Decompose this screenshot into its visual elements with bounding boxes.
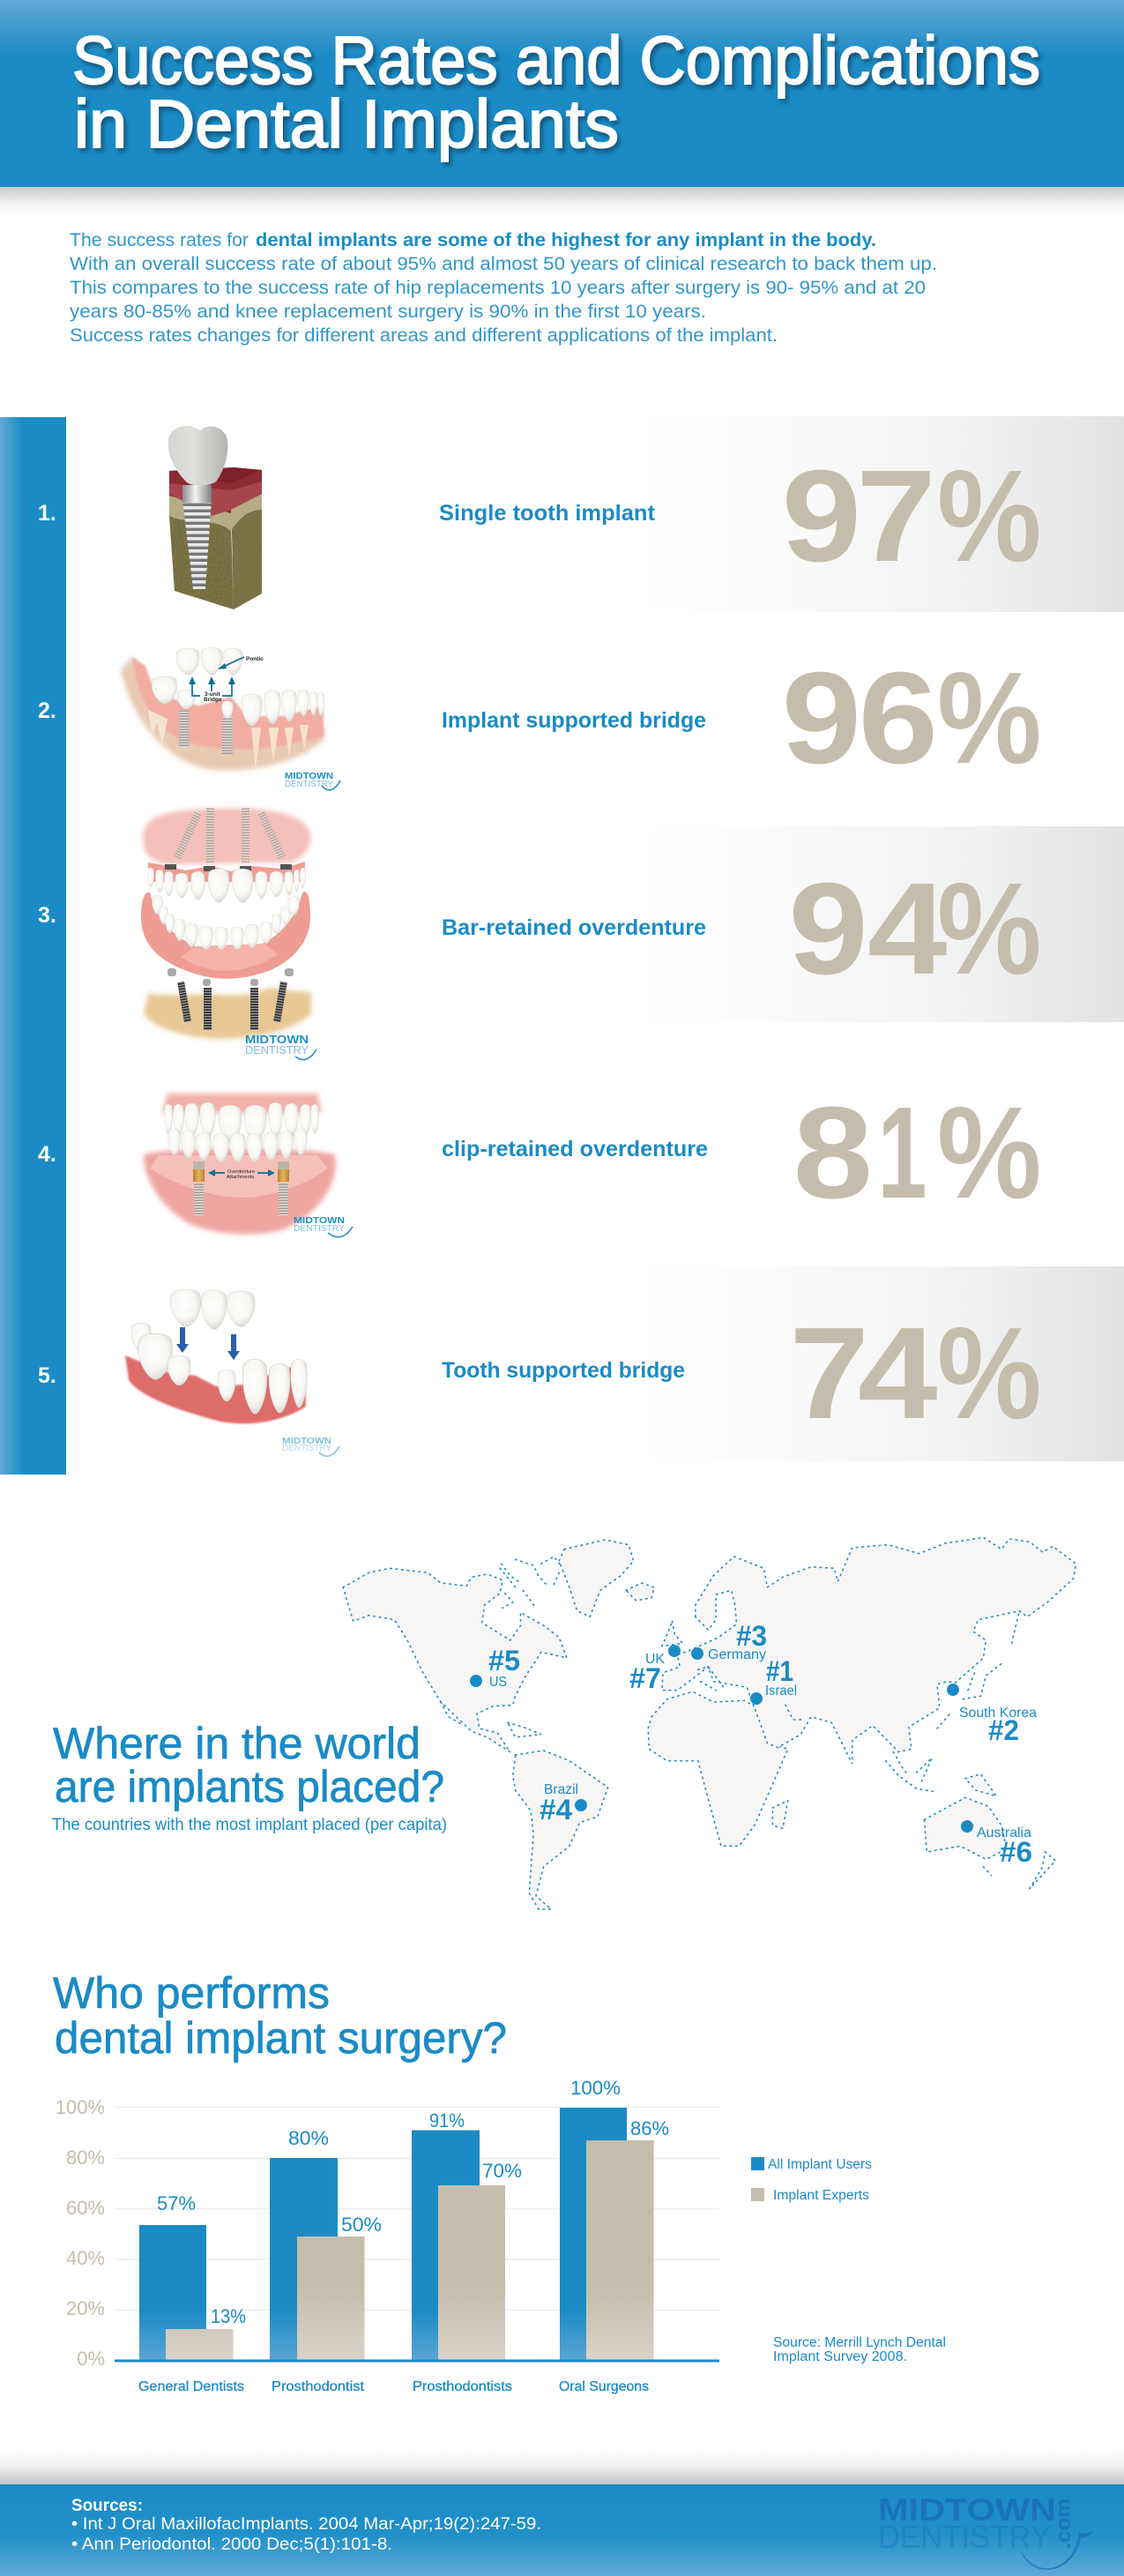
logo: Midtown Dentistry: DENTISTRY	[294, 1223, 345, 1234]
footer sources: • Ann Periodontol. 2000 Dec;5(1):101-8.	[71, 2535, 392, 2554]
footer logo: .com	[1052, 2498, 1076, 2549]
stat: 74%	[789, 1300, 1041, 1446]
map labels: country rankings: #2	[988, 1714, 1019, 1746]
group: prosthodontists	[412, 2131, 505, 2361]
heading: where in the world: are implants placed?	[55, 1762, 444, 1811]
illustration: implant supported bridge: 3-unit	[205, 691, 221, 698]
value labels: 86%	[630, 2117, 669, 2139]
sidebar with rank numbers: 3.	[38, 903, 56, 928]
stat: 96%	[782, 645, 1041, 791]
row labels: Tooth supported bridge	[442, 1358, 685, 1383]
sidebar with rank numbers	[0, 417, 66, 1475]
percentage bands	[635, 416, 1124, 1461]
map labels: country rankings: #7	[629, 1662, 661, 1694]
value labels: 80%	[288, 2127, 329, 2149]
logo: Midtown Dentistry	[282, 1436, 339, 1456]
group: oral surgeons	[560, 2108, 654, 2361]
illustration: clip-retained overdenture: Attachments	[227, 1175, 254, 1180]
stat: 97%	[782, 443, 1041, 589]
title: Success Rates and Complications	[72, 23, 1040, 99]
map labels: country rankings: #5	[488, 1645, 520, 1676]
logo: Midtown Dentistry	[294, 1215, 353, 1237]
illustration: clip-retained overdenture: Overdenture	[227, 1169, 255, 1175]
row labels: clip-retained overdenture	[442, 1137, 708, 1161]
footer sources	[71, 2497, 541, 2554]
row labels	[439, 501, 708, 1383]
footer sources: • Int J Oral MaxillofacImplants. 2004 Mar-Apr;19(2):247-59.	[71, 2515, 541, 2534]
title: in Dental Implants	[74, 86, 619, 162]
stat: 96%: 96	[782, 645, 938, 790]
map labels: country rankings: Germany	[708, 1647, 766, 1662]
illustration: implant supported bridge: Bridge	[204, 697, 222, 703]
map labels: country rankings: UK	[645, 1652, 665, 1667]
stat: 74%: %	[937, 1301, 1041, 1446]
logo: Midtown Dentistry: MIDTOWN	[294, 1215, 345, 1226]
legend: All Implant Users	[768, 2157, 872, 2172]
footer sources: Sources:	[71, 2497, 143, 2515]
stat: 94%: %	[937, 856, 1041, 1002]
stat: 81%	[793, 1079, 1041, 1226]
stat: 96%: %	[937, 646, 1041, 791]
logo: Midtown Dentistry: MIDTOWN	[245, 1034, 309, 1046]
category labels: Oral Surgeons	[559, 2379, 649, 2394]
logo: Midtown Dentistry: MIDTOWN	[282, 1436, 331, 1446]
illustration: tooth supported bridge	[125, 1289, 339, 1456]
sidebar with rank numbers: 2.	[38, 698, 56, 723]
world map	[343, 1537, 1076, 1909]
stat: 94%: 94	[788, 855, 947, 1001]
intro text: With an overall success rate of about 95% and almost 50 years of clinical research to back them up.	[70, 254, 937, 274]
value labels: 57%	[157, 2192, 196, 2214]
stat: 81%: 8	[793, 1079, 873, 1225]
footer logo: DENTISTRY	[878, 2519, 1051, 2555]
footer logo: MIDTOWN	[878, 2493, 1056, 2527]
category labels: Prosthodontist	[272, 2379, 365, 2394]
category labels: Prosthodontists	[413, 2379, 512, 2394]
intro text: Success rates changes for different areas and different applications of the implant.	[70, 325, 778, 346]
intro text: The success rates for	[70, 230, 249, 250]
logo: Midtown Dentistry: DENTISTRY	[282, 1443, 331, 1453]
map pins	[470, 1645, 973, 1833]
heading: who performs	[53, 1968, 507, 2063]
value labels: 70%	[482, 2160, 522, 2182]
map labels: country rankings: Israel	[765, 1684, 797, 1699]
y axis labels: 80%	[66, 2147, 105, 2169]
sidebar with rank numbers: 4.	[38, 1142, 56, 1167]
map labels: country rankings: #6	[1000, 1836, 1032, 1868]
legend: Implant Experts	[773, 2188, 869, 2203]
y axis labels	[56, 2096, 105, 2370]
value labels	[157, 2077, 669, 2327]
header band	[0, 0, 1124, 217]
map labels: country rankings: #3	[736, 1620, 767, 1652]
heading: who performs: Who performs	[53, 1968, 330, 2018]
y axis labels: 0%	[77, 2348, 105, 2370]
map labels: country rankings: Brazil	[544, 1782, 578, 1797]
stat: 94%	[788, 855, 1041, 1002]
y axis labels: 100%	[56, 2096, 105, 2118]
map labels: country rankings: South Korea	[959, 1706, 1037, 1721]
row labels: Implant supported bridge	[442, 708, 706, 733]
logo: Midtown Dentistry	[285, 771, 340, 790]
footer band	[0, 2449, 1124, 2576]
illustration: implant supported bridge: Pontic	[246, 656, 264, 662]
footer logo	[878, 2493, 1093, 2570]
map labels: country rankings	[488, 1620, 1037, 1868]
y axis labels: 40%	[66, 2247, 105, 2269]
map labels: country rankings: US	[489, 1675, 507, 1690]
map labels: country rankings: Australia	[977, 1826, 1031, 1841]
illustration: clip-retained overdenture	[144, 1094, 353, 1237]
heading: where in the world	[52, 1719, 447, 1834]
y axis labels: 60%	[66, 2197, 105, 2219]
stat: 97%: 97	[782, 443, 936, 588]
chart source note	[773, 2335, 946, 2364]
y axis labels: 20%	[66, 2297, 105, 2319]
map labels: country rankings: #4	[540, 1794, 572, 1826]
stat: 81%: 1	[878, 1079, 927, 1226]
sidebar with rank numbers: 5.	[38, 1363, 56, 1388]
value labels: 13%	[211, 2305, 246, 2327]
group: prosthodontist	[270, 2158, 365, 2361]
value labels: 91%	[429, 2109, 465, 2132]
intro text	[70, 230, 937, 346]
intro text: years 80-85% and knee replacement surgery is 90% in the first 10 years.	[70, 302, 706, 322]
intro text: This compares to the success rate of hip replacements 10 years after surgery is 90- 95% and at 20	[70, 278, 926, 298]
logo: Midtown Dentistry: MIDTOWN	[285, 771, 333, 781]
logo: Midtown Dentistry: DENTISTRY	[245, 1044, 309, 1057]
illustration: implant supported bridge	[121, 647, 340, 790]
category labels: General Dentists	[138, 2379, 244, 2394]
logo: Midtown Dentistry: DENTISTRY	[285, 779, 333, 789]
heading: who performs: dental implant surgery?	[55, 2013, 507, 2063]
logo: Midtown Dentistry	[245, 1034, 316, 1060]
legend	[751, 2157, 872, 2203]
stat: 97%: %	[937, 444, 1041, 589]
value labels: 50%	[341, 2214, 382, 2236]
category labels	[138, 2379, 649, 2394]
intro text: dental implants are some of the highest for any implant in the body.	[256, 230, 876, 250]
group: general dentists	[139, 2225, 233, 2361]
bar chart	[56, 2077, 719, 2394]
stat: 81%: %	[937, 1080, 1041, 1226]
row labels: Bar-retained overdenture	[442, 915, 706, 940]
value labels: 100%	[570, 2077, 621, 2099]
illustration: bar-retained overdenture	[141, 808, 316, 1060]
title	[72, 23, 1040, 162]
stat: 74%: 74	[789, 1300, 937, 1445]
heading: where in the world: The countries with the most implant placed (per capita)	[52, 1816, 447, 1834]
sidebar with rank numbers: 1.	[38, 501, 56, 526]
map labels: country rankings: #1	[766, 1655, 793, 1687]
heading: where in the world: Where in the world	[53, 1719, 421, 1768]
illustration: single tooth implant	[168, 426, 262, 609]
row labels: Single tooth implant	[439, 501, 656, 526]
chart source note: Implant Survey 2008.	[773, 2349, 907, 2364]
chart source note: Source: Merrill Lynch Dental	[773, 2335, 946, 2350]
